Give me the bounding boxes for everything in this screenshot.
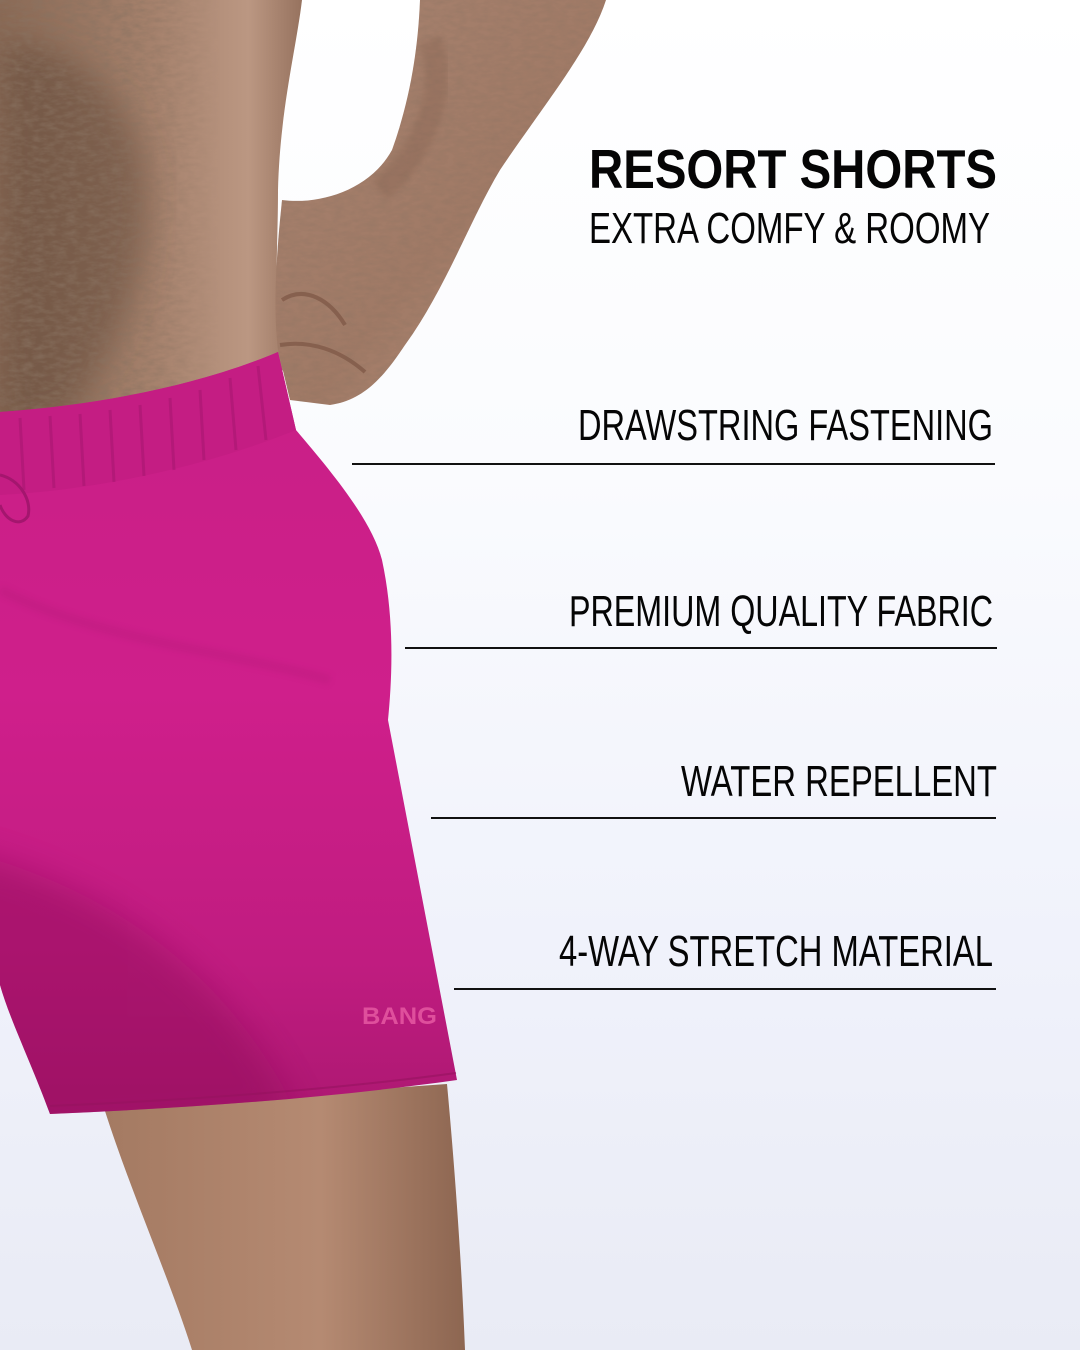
lower shadow [0,854,286,1114]
arm hair texture [278,2,576,404]
shorts [0,352,457,1140]
chest and belly hair [0,40,147,430]
title: RESORT SHORTS [589,138,997,200]
finger shadows [280,294,365,372]
torso [0,0,303,430]
leg [104,1084,465,1350]
waistband [0,352,296,495]
arm and hand [270,0,610,410]
hair texture [0,0,184,410]
photo: model in pink shorts [0,0,610,1350]
drawstring [0,475,29,522]
brand mark: BANG [362,1003,437,1030]
hem line [50,1073,456,1106]
waistband gathers [20,366,266,490]
fabric fold [0,590,330,680]
